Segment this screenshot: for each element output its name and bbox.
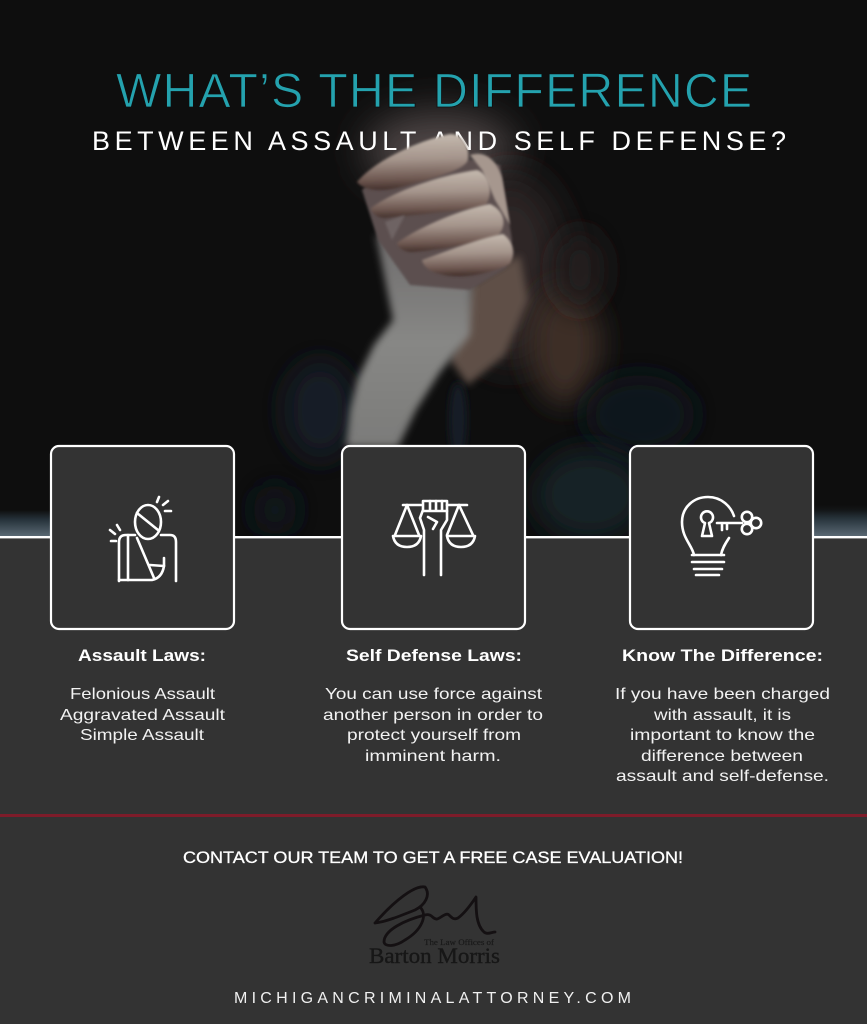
horizontal connector line (0, 536, 867, 538)
card (342, 446, 525, 629)
website url: MICHIGANCRIMINALATTORNEY.COM (234, 990, 631, 1007)
icon: light bulb with key (682, 497, 761, 575)
panel: assault laws (51, 446, 234, 744)
card (630, 446, 813, 629)
subtitle: BETWEEN ASSAULT AND SELF DEFENSE? (92, 126, 786, 156)
logo small text: The Law Offices of (424, 938, 494, 947)
list: assault types: Simple Assault (80, 727, 205, 744)
logo name: Barton Morris (369, 943, 500, 968)
list: assault types: Felonious Assault (70, 686, 216, 703)
panel: know the difference (615, 446, 830, 785)
heading: know the difference: Know The Difference: (622, 646, 823, 665)
text: difference explanation: important to know the (630, 727, 815, 744)
logo signature (375, 887, 495, 946)
heading: self defense laws: Self Defense Laws: (346, 646, 522, 665)
logo: barton morris (369, 887, 500, 968)
icon: injured person with sling (110, 497, 176, 581)
text: difference explanation: difference between (641, 748, 803, 765)
text: self defense explanation: protect yourself from (347, 727, 521, 744)
bottom panel (0, 537, 867, 1024)
text: self defense explanation: You can use force against (325, 686, 543, 703)
card (51, 446, 234, 629)
icon: fist with scales (393, 501, 475, 575)
call to action: CONTACT OUR TEAM TO GET A FREE CASE EVALUATION! (183, 848, 683, 867)
text: difference explanation: If you have been charged (615, 686, 830, 703)
list: assault types: Aggravated Assault (60, 707, 226, 724)
text: self defense explanation: another person in order to (323, 707, 543, 724)
text: self defense explanation: imminent harm. (365, 748, 501, 765)
text: difference explanation: with assault, it is (653, 707, 791, 724)
heading: what's the difference: WHAT’S THE DIFFERENCE (116, 65, 752, 118)
list: assault types (60, 686, 226, 744)
photo: raised fist (346, 134, 528, 447)
text: difference explanation: assault and self-defense. (616, 768, 829, 785)
text: difference explanation (615, 686, 830, 785)
heading: assault laws: Assault Laws: (78, 646, 206, 665)
photo background (0, 0, 867, 540)
text: self defense explanation (323, 686, 543, 765)
panel: self defense laws (323, 446, 543, 765)
divider: red (0, 814, 867, 817)
